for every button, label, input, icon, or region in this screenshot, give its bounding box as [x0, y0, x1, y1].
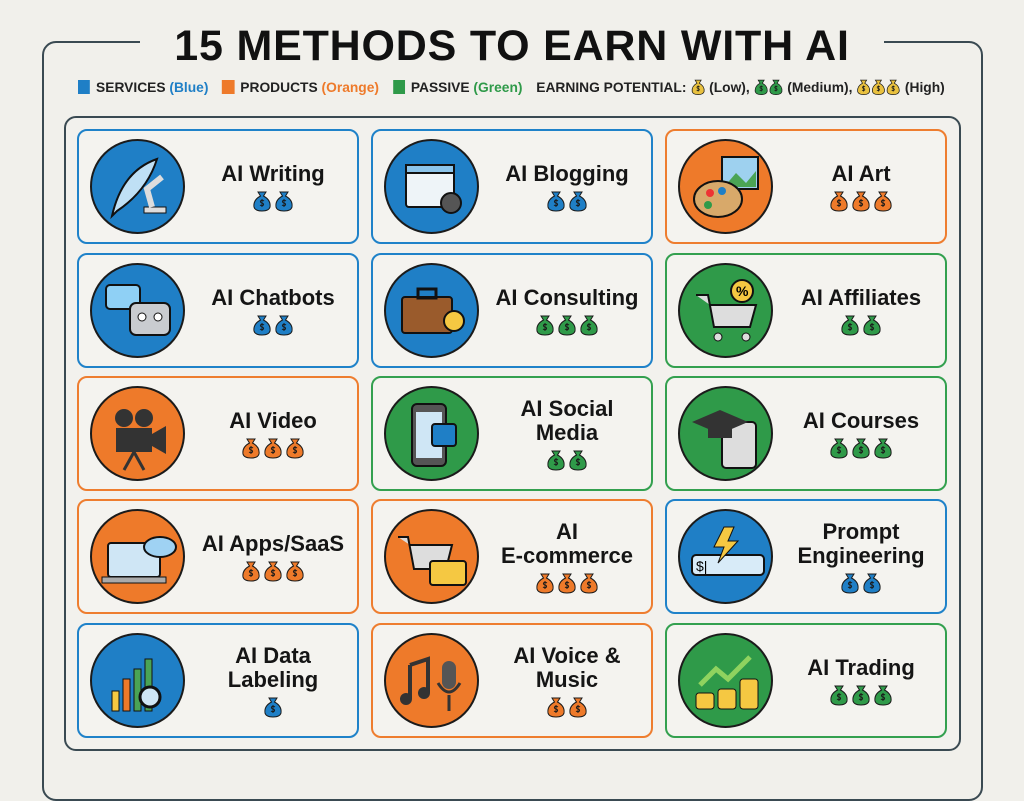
card: AI Trading — [665, 623, 947, 738]
card: AI Video: AI Video — [229, 408, 317, 432]
card: AI Affiliates — [665, 253, 947, 368]
card: AI Apps/SaaS — [77, 499, 359, 614]
icon: coins and arrow — [678, 633, 773, 728]
icon: palette and picture — [678, 139, 773, 234]
icon: cart with percent: % — [736, 283, 749, 299]
card: AI Courses — [665, 376, 947, 491]
card: AI Data Labeling: Labeling — [228, 666, 318, 692]
icon: laptop with cloud — [90, 509, 185, 604]
card: AI Voice & Music — [371, 623, 653, 738]
card: AI E-commerce — [371, 499, 653, 614]
card: AI Affiliates: AI Affiliates — [801, 284, 921, 310]
icon: browser with gear — [384, 139, 479, 234]
icon: cart with percent — [678, 263, 773, 358]
card: AI Trading: AI Trading — [807, 654, 915, 680]
card: AI Consulting: AI Consulting — [496, 284, 638, 310]
card: AI Social Media: Media — [536, 420, 598, 444]
card: AI Chatbots: AI Chatbots — [211, 284, 335, 310]
icon: prompt bar with lightning: $| — [696, 558, 707, 574]
icon: feather and robot arm — [90, 139, 185, 234]
legend: (Orange) — [322, 79, 379, 95]
card: AI E-commerce: AI — [556, 518, 578, 544]
card: AI Writing: AI Writing — [221, 160, 325, 186]
icon: movie camera — [90, 386, 185, 481]
card: AI Voice & Music: AI Voice & — [513, 642, 621, 668]
card: Prompt Engineering: Engineering — [797, 542, 925, 568]
icon: bar chart with magnifier — [90, 633, 185, 728]
icon: phone with like — [384, 386, 479, 481]
card: AI Art: AI Art — [831, 160, 891, 186]
card: AI Apps/SaaS: AI Apps/SaaS — [202, 530, 344, 556]
icon: cart and card — [384, 509, 479, 604]
legend: (Blue) — [169, 79, 208, 95]
card: AI Data Labeling: AI Data — [235, 642, 311, 668]
icon: chat robot — [90, 263, 185, 358]
icon: briefcase and bulb — [384, 263, 479, 358]
legend: EARNING POTENTIAL: — [536, 79, 686, 95]
card: AI Blogging — [371, 129, 653, 244]
legend: (Green) — [473, 79, 522, 95]
card: AI Chatbots — [77, 253, 359, 368]
card: AI Data Labeling — [77, 623, 359, 738]
card: AI Art — [665, 129, 947, 244]
title: 15 METHODS TO EARN WITH AI — [174, 22, 850, 70]
card: AI Blogging: AI Blogging — [505, 160, 629, 186]
card: Prompt Engineering — [665, 499, 947, 614]
inner panel — [64, 116, 961, 751]
card: AI Social Media — [371, 376, 653, 491]
card: AI Voice & Music: Music — [536, 666, 598, 692]
card: AI Writing — [77, 129, 359, 244]
icon: grad cap and tablet — [678, 386, 773, 481]
card: Prompt Engineering: Prompt — [822, 518, 900, 544]
card: AI Consulting — [371, 253, 653, 368]
card: AI Video — [77, 376, 359, 491]
icon: prompt bar with lightning — [678, 509, 773, 604]
legend: SERVICES PRODUCTS PASSIVE (Low), (Medium), (High) — [96, 79, 945, 95]
card: AI Courses: AI Courses — [803, 408, 919, 432]
card: AI Social Media: AI Social — [521, 396, 613, 420]
icon: note and mic — [384, 633, 479, 728]
card: AI E-commerce: E-commerce — [501, 542, 633, 568]
